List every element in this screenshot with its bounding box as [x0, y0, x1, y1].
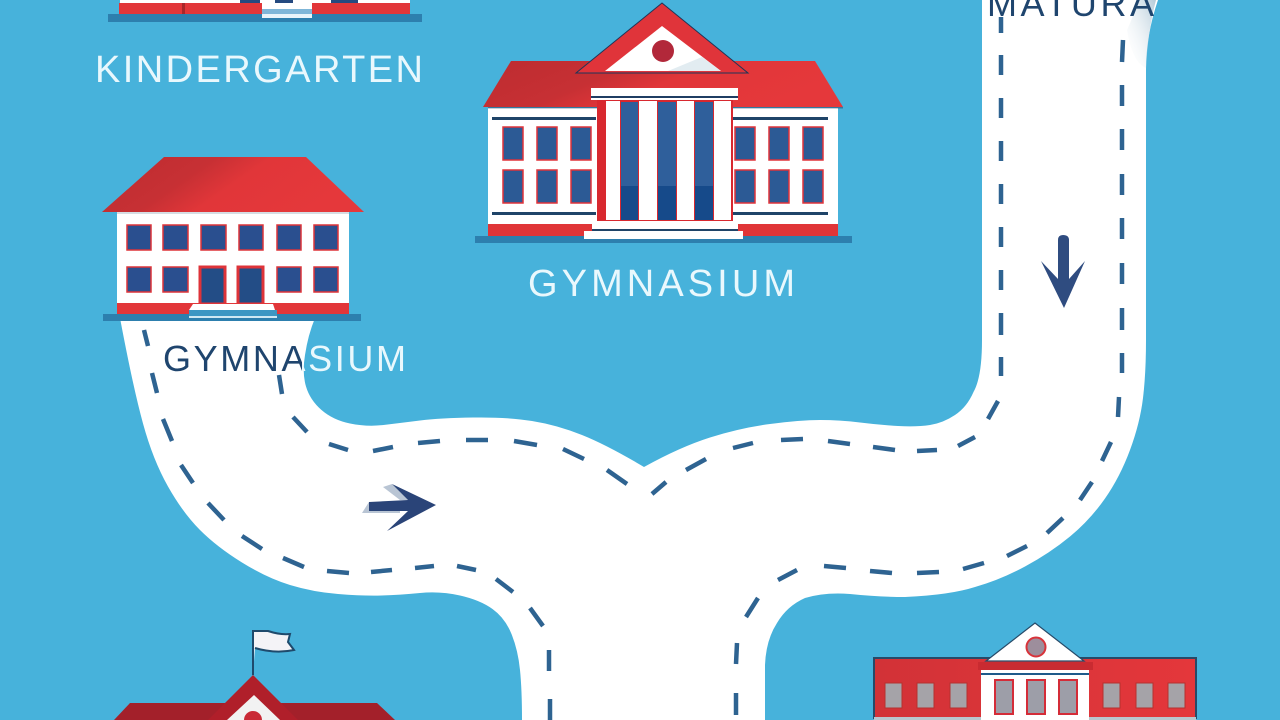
- windows: [503, 127, 823, 203]
- label: central gymnasium: GYMNASIUM: [528, 263, 795, 305]
- label: kindergarten: KINDERGARTEN: [95, 49, 423, 91]
- plinth: [117, 303, 349, 315]
- steps: [189, 304, 275, 310]
- building: left gymnasium: [102, 157, 364, 321]
- arrow: road down: [1041, 235, 1085, 308]
- roof: [102, 157, 364, 212]
- lane dashes: right inner: [652, 17, 1001, 494]
- roof: [483, 61, 843, 107]
- lane dashes: left inner: [279, 375, 627, 484]
- doors: [200, 267, 225, 304]
- pediment: [576, 3, 748, 73]
- plinth: [488, 224, 838, 238]
- building: central gymnasium: [475, 3, 852, 243]
- label: left gymnasium: GYMNASIUM: [163, 338, 406, 379]
- lane dashes: right outer: [736, 40, 1123, 715]
- building: bottom-right school: [874, 623, 1196, 720]
- portico: [597, 96, 733, 222]
- wall: [488, 108, 838, 225]
- flag: [253, 631, 294, 675]
- gable: [208, 675, 298, 720]
- steps: [592, 221, 738, 229]
- windows: [127, 225, 338, 292]
- arrow: road right: [362, 484, 436, 531]
- road shading at top right: [1127, 0, 1156, 68]
- lane dashes: left outer: [144, 330, 550, 720]
- ground line: [103, 314, 361, 321]
- wall: [117, 212, 349, 304]
- roof: [114, 703, 395, 720]
- building: kindergarten (cropped): [108, 0, 422, 22]
- ground line: [475, 236, 852, 243]
- building: bottom-left school with flag: [114, 631, 395, 720]
